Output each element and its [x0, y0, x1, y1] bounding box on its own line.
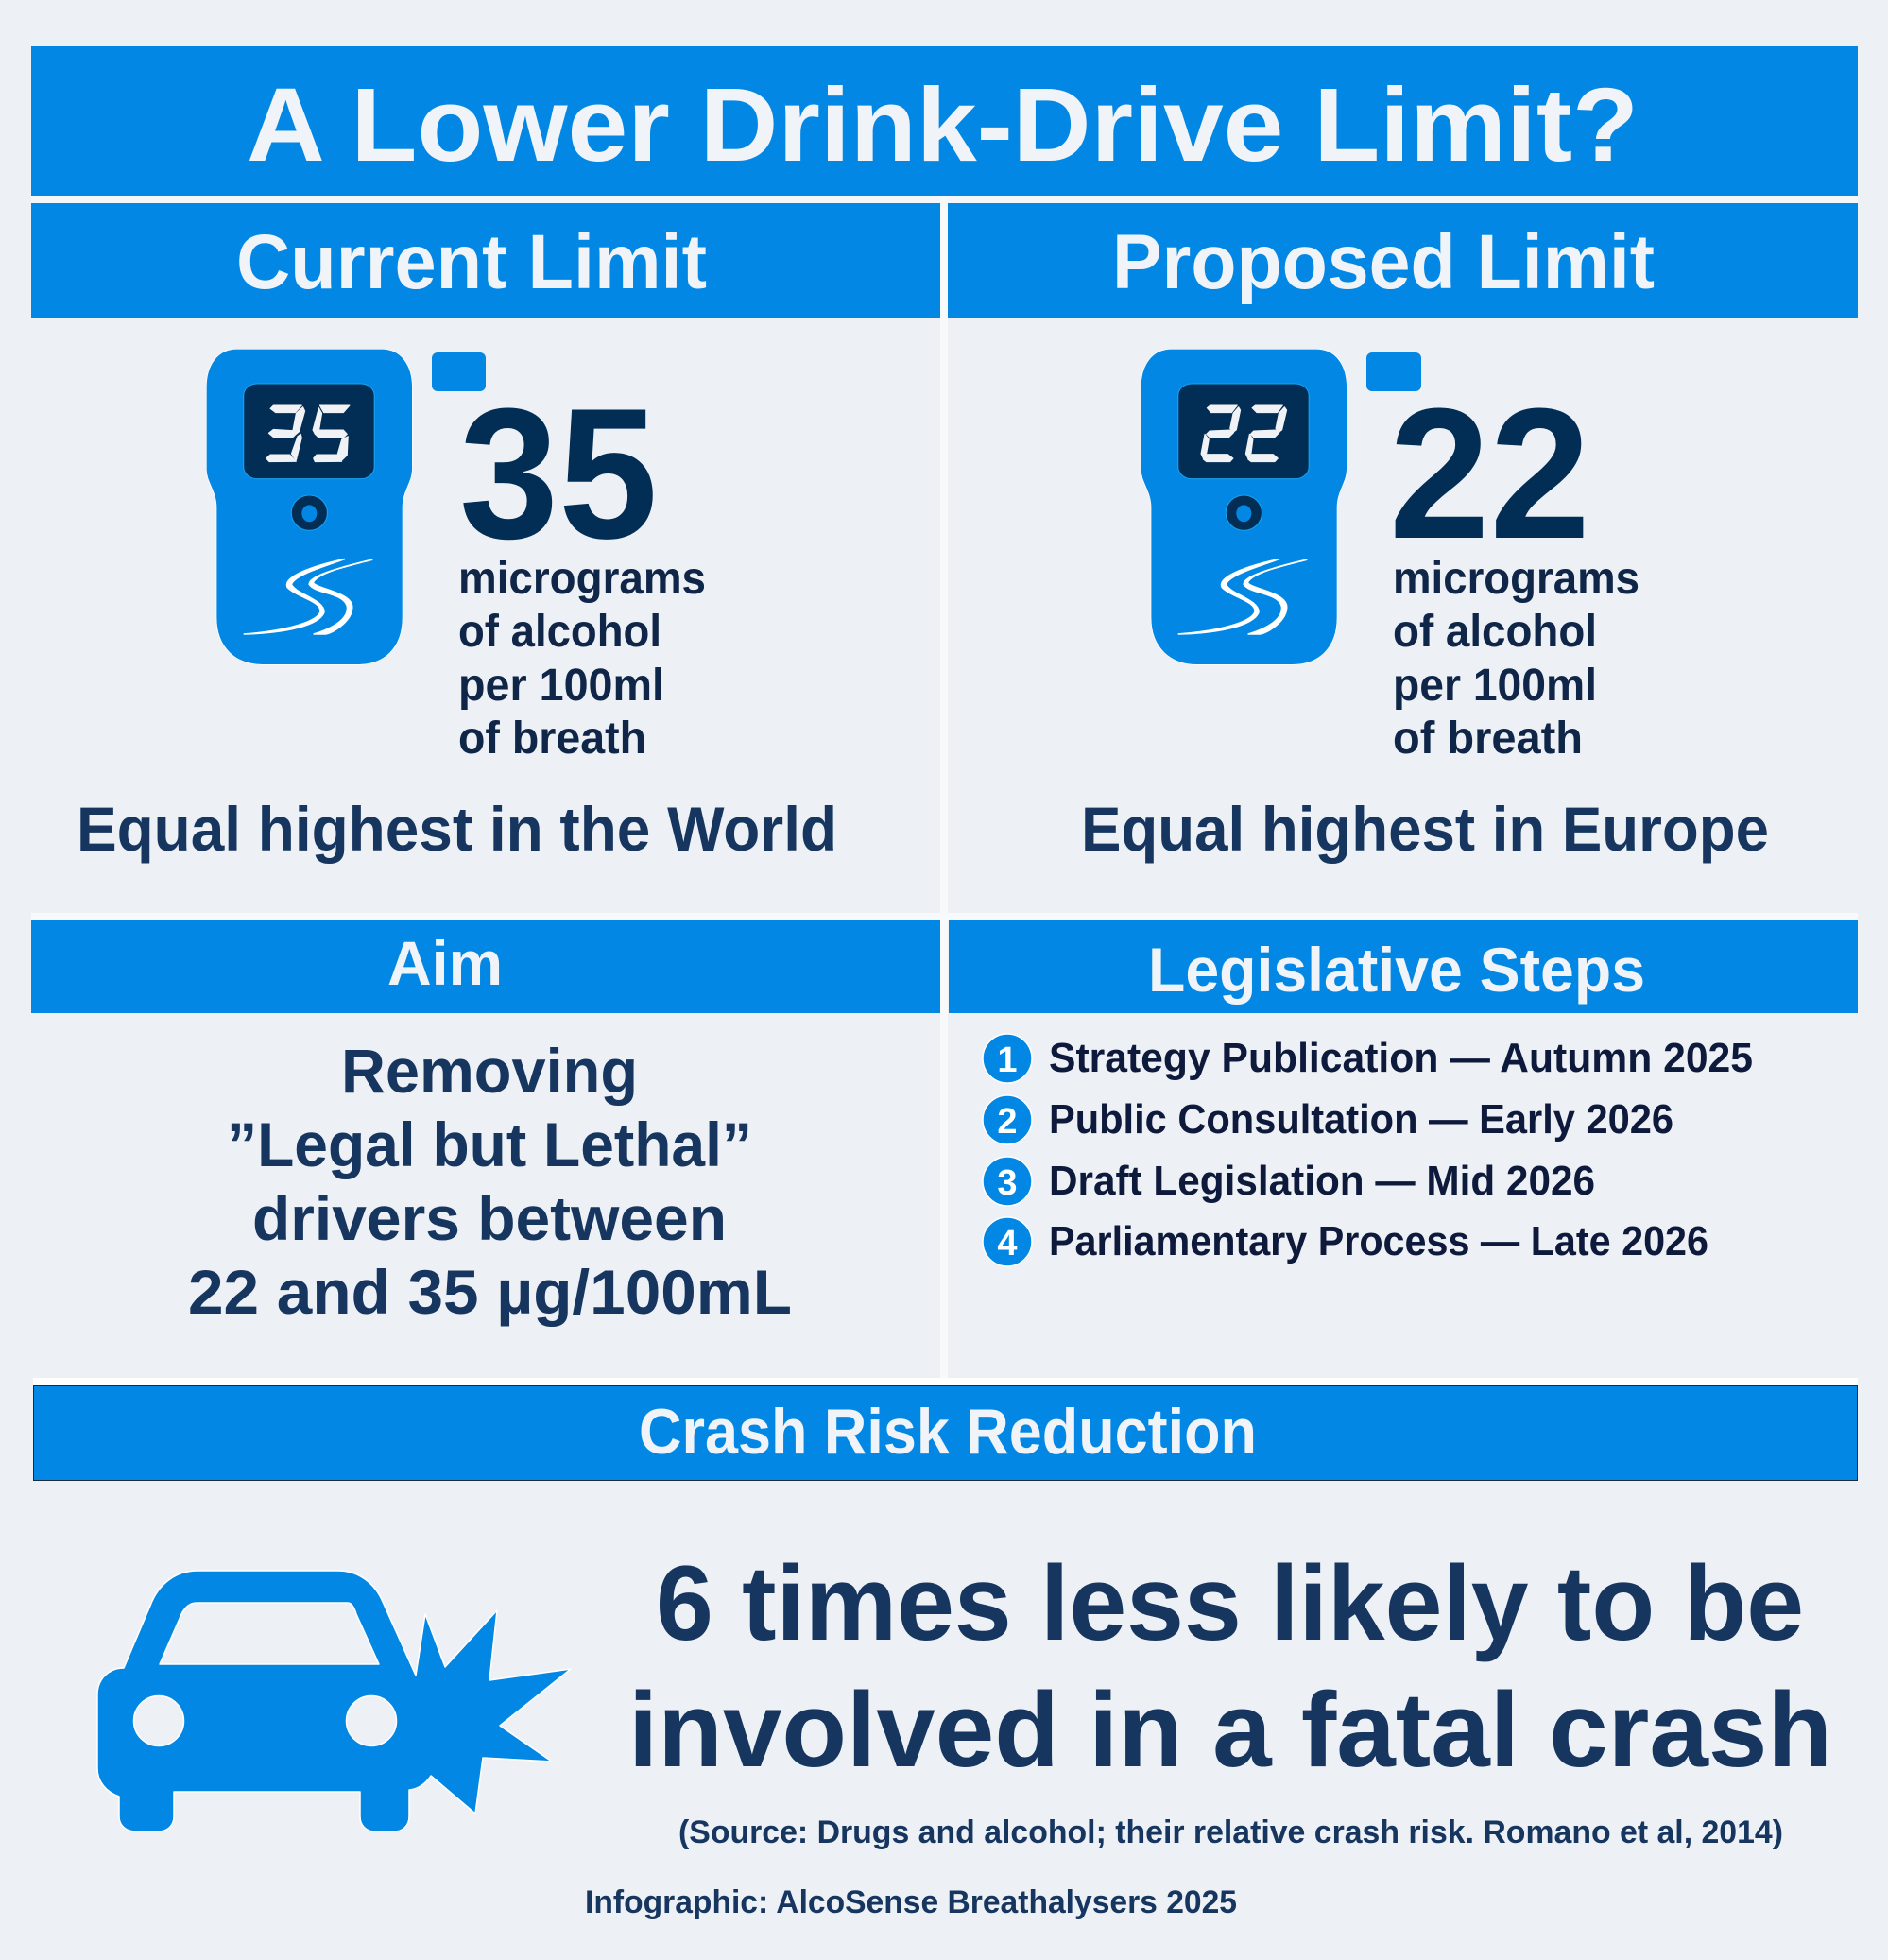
step 2: Public Consultation — Early 2026	[1049, 1096, 1673, 1143]
heading: proposed limit	[948, 203, 1858, 318]
unit text	[458, 554, 706, 764]
heading: current limit	[31, 203, 940, 318]
panel: legislative steps	[949, 920, 1858, 1266]
small blue indicator	[432, 352, 486, 391]
aim statement: drivers between	[252, 1183, 727, 1253]
source note: (Source: Drugs and alcohol; their relative crash risk. Romano et al, 2014)	[678, 1814, 1783, 1850]
heading: current limit: Current Limit	[236, 219, 707, 305]
small blue indicator	[1366, 352, 1421, 391]
heading: legislative steps	[949, 920, 1858, 1013]
heading: aim: Aim	[387, 928, 503, 998]
unit text: micrograms	[458, 554, 706, 604]
unit text: of alcohol	[458, 607, 661, 657]
unit text: of breath	[1393, 714, 1583, 764]
panel: proposed limit	[948, 203, 1858, 864]
step 1: Strategy Publication — Autumn 2025	[1049, 1035, 1753, 1081]
icon: car crash	[97, 1571, 571, 1831]
headline: 6 times less likely	[628, 1544, 1832, 1789]
heading: proposed limit: Proposed Limit	[1112, 219, 1655, 305]
heading: legislative steps: Legislative Steps	[1148, 935, 1645, 1005]
title banner	[31, 46, 1858, 196]
heading: crash risk reduction: Crash Risk Reduction	[639, 1396, 1257, 1468]
credit line: Infographic: AlcoSense Breathalysers 2025	[585, 1884, 1237, 1920]
big number 22: 22	[1389, 370, 1590, 577]
step 2: 2	[997, 1102, 1018, 1142]
headline: 6 times less likely: 6 times less likely to be	[656, 1544, 1804, 1662]
step 4: 4	[997, 1224, 1018, 1264]
step 1: 1	[997, 1040, 1018, 1080]
unit text: per 100ml	[1393, 661, 1597, 711]
panel: crash risk reduction	[34, 1385, 1858, 1850]
aim statement: ”Legal but Lethal”	[227, 1109, 752, 1179]
headline: 6 times less likely: involved in a fatal crash	[628, 1671, 1832, 1789]
unit text: micrograms	[1393, 554, 1639, 604]
unit text: of alcohol	[1393, 607, 1597, 657]
panel: aim	[31, 920, 940, 1327]
step 3: Draft Legislation — Mid 2026	[1049, 1158, 1595, 1204]
title banner: A Lower Drink-Drive Limit?	[247, 67, 1639, 183]
step 4: Parliamentary Process — Late 2026	[1049, 1218, 1708, 1264]
aim statement	[188, 1036, 792, 1327]
caption: equal highest in the world: Equal highest in the World	[77, 794, 837, 864]
panel: current limit	[31, 203, 940, 864]
big number 35: 35	[459, 370, 658, 577]
heading: aim	[31, 920, 940, 1013]
heading: crash risk reduction	[34, 1385, 1858, 1480]
unit text	[1393, 554, 1639, 764]
unit text: of breath	[458, 714, 646, 764]
step 3: 3	[997, 1163, 1018, 1203]
aim statement: 22 and 35 µg/100mL	[188, 1257, 792, 1327]
caption: equal highest in europe: Equal highest in Europe	[1081, 794, 1769, 864]
icon: breathalyser showing 22	[1141, 349, 1347, 664]
unit text: per 100ml	[458, 661, 664, 711]
aim statement: Removing	[341, 1036, 638, 1106]
icon: breathalyser showing 35	[206, 349, 412, 664]
